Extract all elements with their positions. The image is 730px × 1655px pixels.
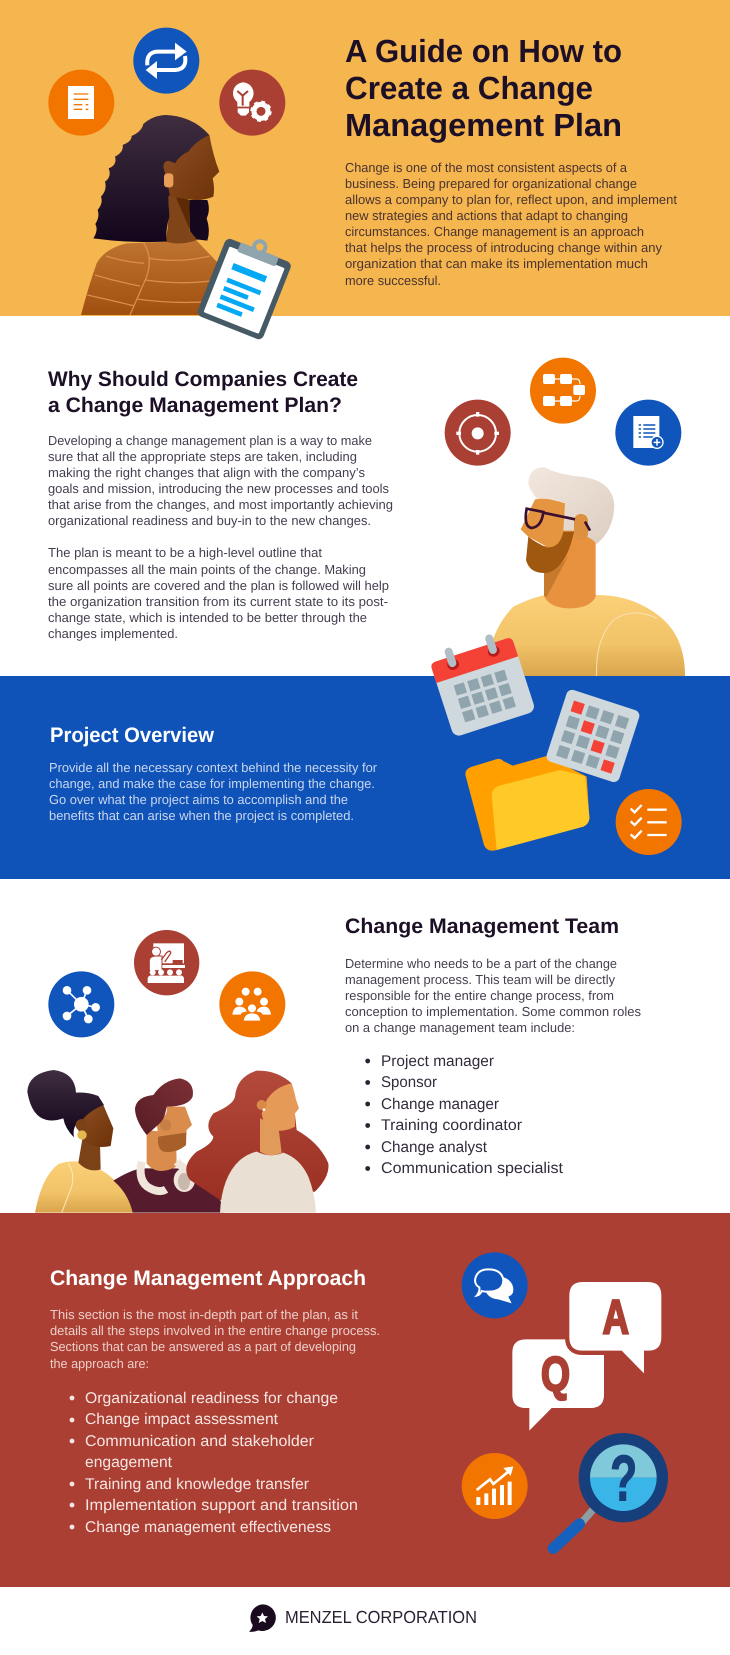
man: hair [528,467,614,544]
list: approach sections: Organizational readiness for change [85,1390,338,1407]
panel: project overview background [0,676,730,879]
text block: why paragraph two [48,545,389,641]
woman: hair [93,115,213,242]
man: neck shadow [544,543,575,597]
text block: why paragraph one: Developing a change management plan is a way to make [48,433,372,448]
text block: why paragraph two: encompasses all the main points of the change. Making [48,562,366,577]
list: approach sections: Change impact assessment [85,1411,279,1428]
list: team roles: Communication specialist [381,1160,564,1177]
panel: change management approach background [0,1213,730,1587]
title: Create a Change [345,70,593,106]
text block: why paragraph two: sure all points are covered and the plan is followed will help [48,578,389,593]
icon: document [48,70,114,136]
intro paragraph: circumstances. Change management is an approach [345,224,644,239]
heading: project overview: Project Overview [50,724,215,747]
icon: group of people [219,971,285,1037]
text block: team description: responsible for the entire change process, from [345,988,614,1003]
text block: project overview: Go over what the project aims to accomplish and the [49,792,348,807]
list: team roles: Sponsor [381,1074,437,1091]
intro paragraph: organization that can make its implementation much [345,256,648,271]
man: ear [574,514,588,540]
text block: team description: management process. This team will be directly [345,972,615,987]
list: approach sections: Training and knowledge transfer [85,1476,309,1493]
icon: repeat arrows [133,28,199,94]
text block: approach description [50,1307,380,1371]
illustration: woman with clipboard and icons [48,28,296,341]
person: woman with dark bun [27,1070,133,1213]
text block: team description: conception to implementation. Some common roles [345,1004,641,1019]
text block: why paragraph one: goals and mission, introducing the new processes and tools [48,481,389,496]
icon: calendar [427,628,536,738]
text block: team description: Determine who needs to be a part of the change [345,956,617,971]
icon: chat bubbles [462,1252,528,1318]
man: shirt [487,595,685,676]
person: man with headphones [113,1078,224,1213]
title [345,33,622,143]
illustration: calendars, folder and checklist [427,628,682,855]
text block: why paragraph two: change state, which is intended to be better through the [48,610,367,625]
list: approach sections [70,1390,358,1536]
illustration: man with glasses and icons [445,358,685,676]
text block: project overview: benefits that can arise when the project is completed. [49,808,354,823]
woman: back hair [189,200,209,241]
icon: question bubble: Q [541,1347,570,1401]
intro paragraph: new strategies and actions that adapt to changing [345,208,628,223]
intro paragraph: Change is one of the most consistent aspects of a [345,160,628,175]
list: approach sections: Implementation support and transition [85,1497,358,1514]
list: team roles [365,1053,564,1177]
intro paragraph: business. Being prepared for organizational change [345,176,637,191]
clipboard [196,227,296,341]
intro paragraph: that helps the process of introducing change within any [345,240,662,255]
person: woman with red hair [186,1071,328,1213]
woman: neck [166,195,197,243]
intro paragraph [345,160,677,288]
text block: why paragraph two: changes implemented. [48,626,178,641]
heading: change management team: Change Management Team [345,915,619,938]
list: team roles: Change analyst [381,1139,488,1156]
text block: why paragraph two: the organization transition from its current state to its post- [48,594,388,609]
intro paragraph: allows a company to plan for, reflect upon, and implement [345,192,677,207]
icon: checklist [616,789,682,855]
footer logo [249,1604,276,1632]
text block: approach description: the approach are: [50,1356,149,1371]
man: beard [526,532,574,573]
heading: why should companies [48,368,358,417]
man: neck [544,527,596,608]
list: team roles: Project manager [381,1053,494,1070]
text block: why paragraph one: organizational readiness and buy-in to the new changes. [48,513,371,528]
woman: sweater [81,241,218,315]
icon: target [445,400,511,466]
list: team roles: Change manager [381,1096,499,1113]
woman: face [163,135,219,200]
text block: team description: on a change management team include: [345,1020,575,1035]
icon: question bubble [512,1339,604,1431]
title: A Guide on How to [345,33,622,69]
icon: magnifying glass with question mark [553,1433,668,1548]
icon: presenter [134,930,199,995]
man: face [521,499,573,549]
list: approach sections: Change management effectiveness [85,1519,331,1536]
text block: why paragraph one: making the right changes that align with the company’s [48,465,365,480]
text block: why paragraph two: The plan is meant to be a high-level outline that [48,545,322,560]
illustration: three team members and icons [27,930,328,1213]
woman: earring [164,173,173,187]
panel: intro background [0,0,730,316]
icon: growth chart [462,1453,528,1519]
list: approach sections: Communication and stakeholder [85,1433,314,1450]
text block: approach description: This section is the most in-depth part of the plan, as it [50,1307,358,1322]
text block: why paragraph one: sure that all the appropriate steps are taken, including [48,449,357,464]
footer company name: MENZEL CORPORATION [285,1607,477,1627]
icon: document with plus [615,400,681,466]
list: team roles: Training coordinator [381,1117,522,1134]
text block: why paragraph one: that arise from the changes, and most importantly achieving [48,497,393,512]
text block: project overview: Provide all the necessary context behind the necessity for [49,760,378,775]
text block: why paragraph one [48,433,393,528]
text block: project overview [49,760,378,823]
text block: approach description: details all the steps involved in the entire change process. [50,1323,380,1338]
heading: change management approach: Change Management Approach [50,1267,366,1290]
text block: project overview: change, and make the case for implementing the change. [49,776,375,791]
icon: folder [465,756,589,851]
icon: bulb and gear [219,70,285,136]
text block: approach description: Sections that can be answered as a part of developing [50,1339,356,1354]
heading: why should companies: Why Should Companies Create [48,368,358,391]
title: Management Plan [345,107,622,143]
text block: team description [345,956,641,1035]
icon: magnifying glass with question mark: ? [610,1442,637,1515]
list: approach sections: engagement [85,1454,173,1471]
illustration: questions and answers icons [462,1252,668,1548]
intro paragraph: more successful. [345,273,441,288]
icon: answer bubble: A [603,1290,629,1344]
icon: flow chart [530,358,596,424]
man: glasses [526,509,590,531]
icon: network [48,971,114,1037]
woman: neck shadow [175,195,190,230]
icon: marked calendar [545,688,641,784]
man: shirt seam [597,613,657,676]
icon: answer bubble [569,1282,661,1373]
heading: why should companies: a Change Management Plan? [48,394,342,417]
